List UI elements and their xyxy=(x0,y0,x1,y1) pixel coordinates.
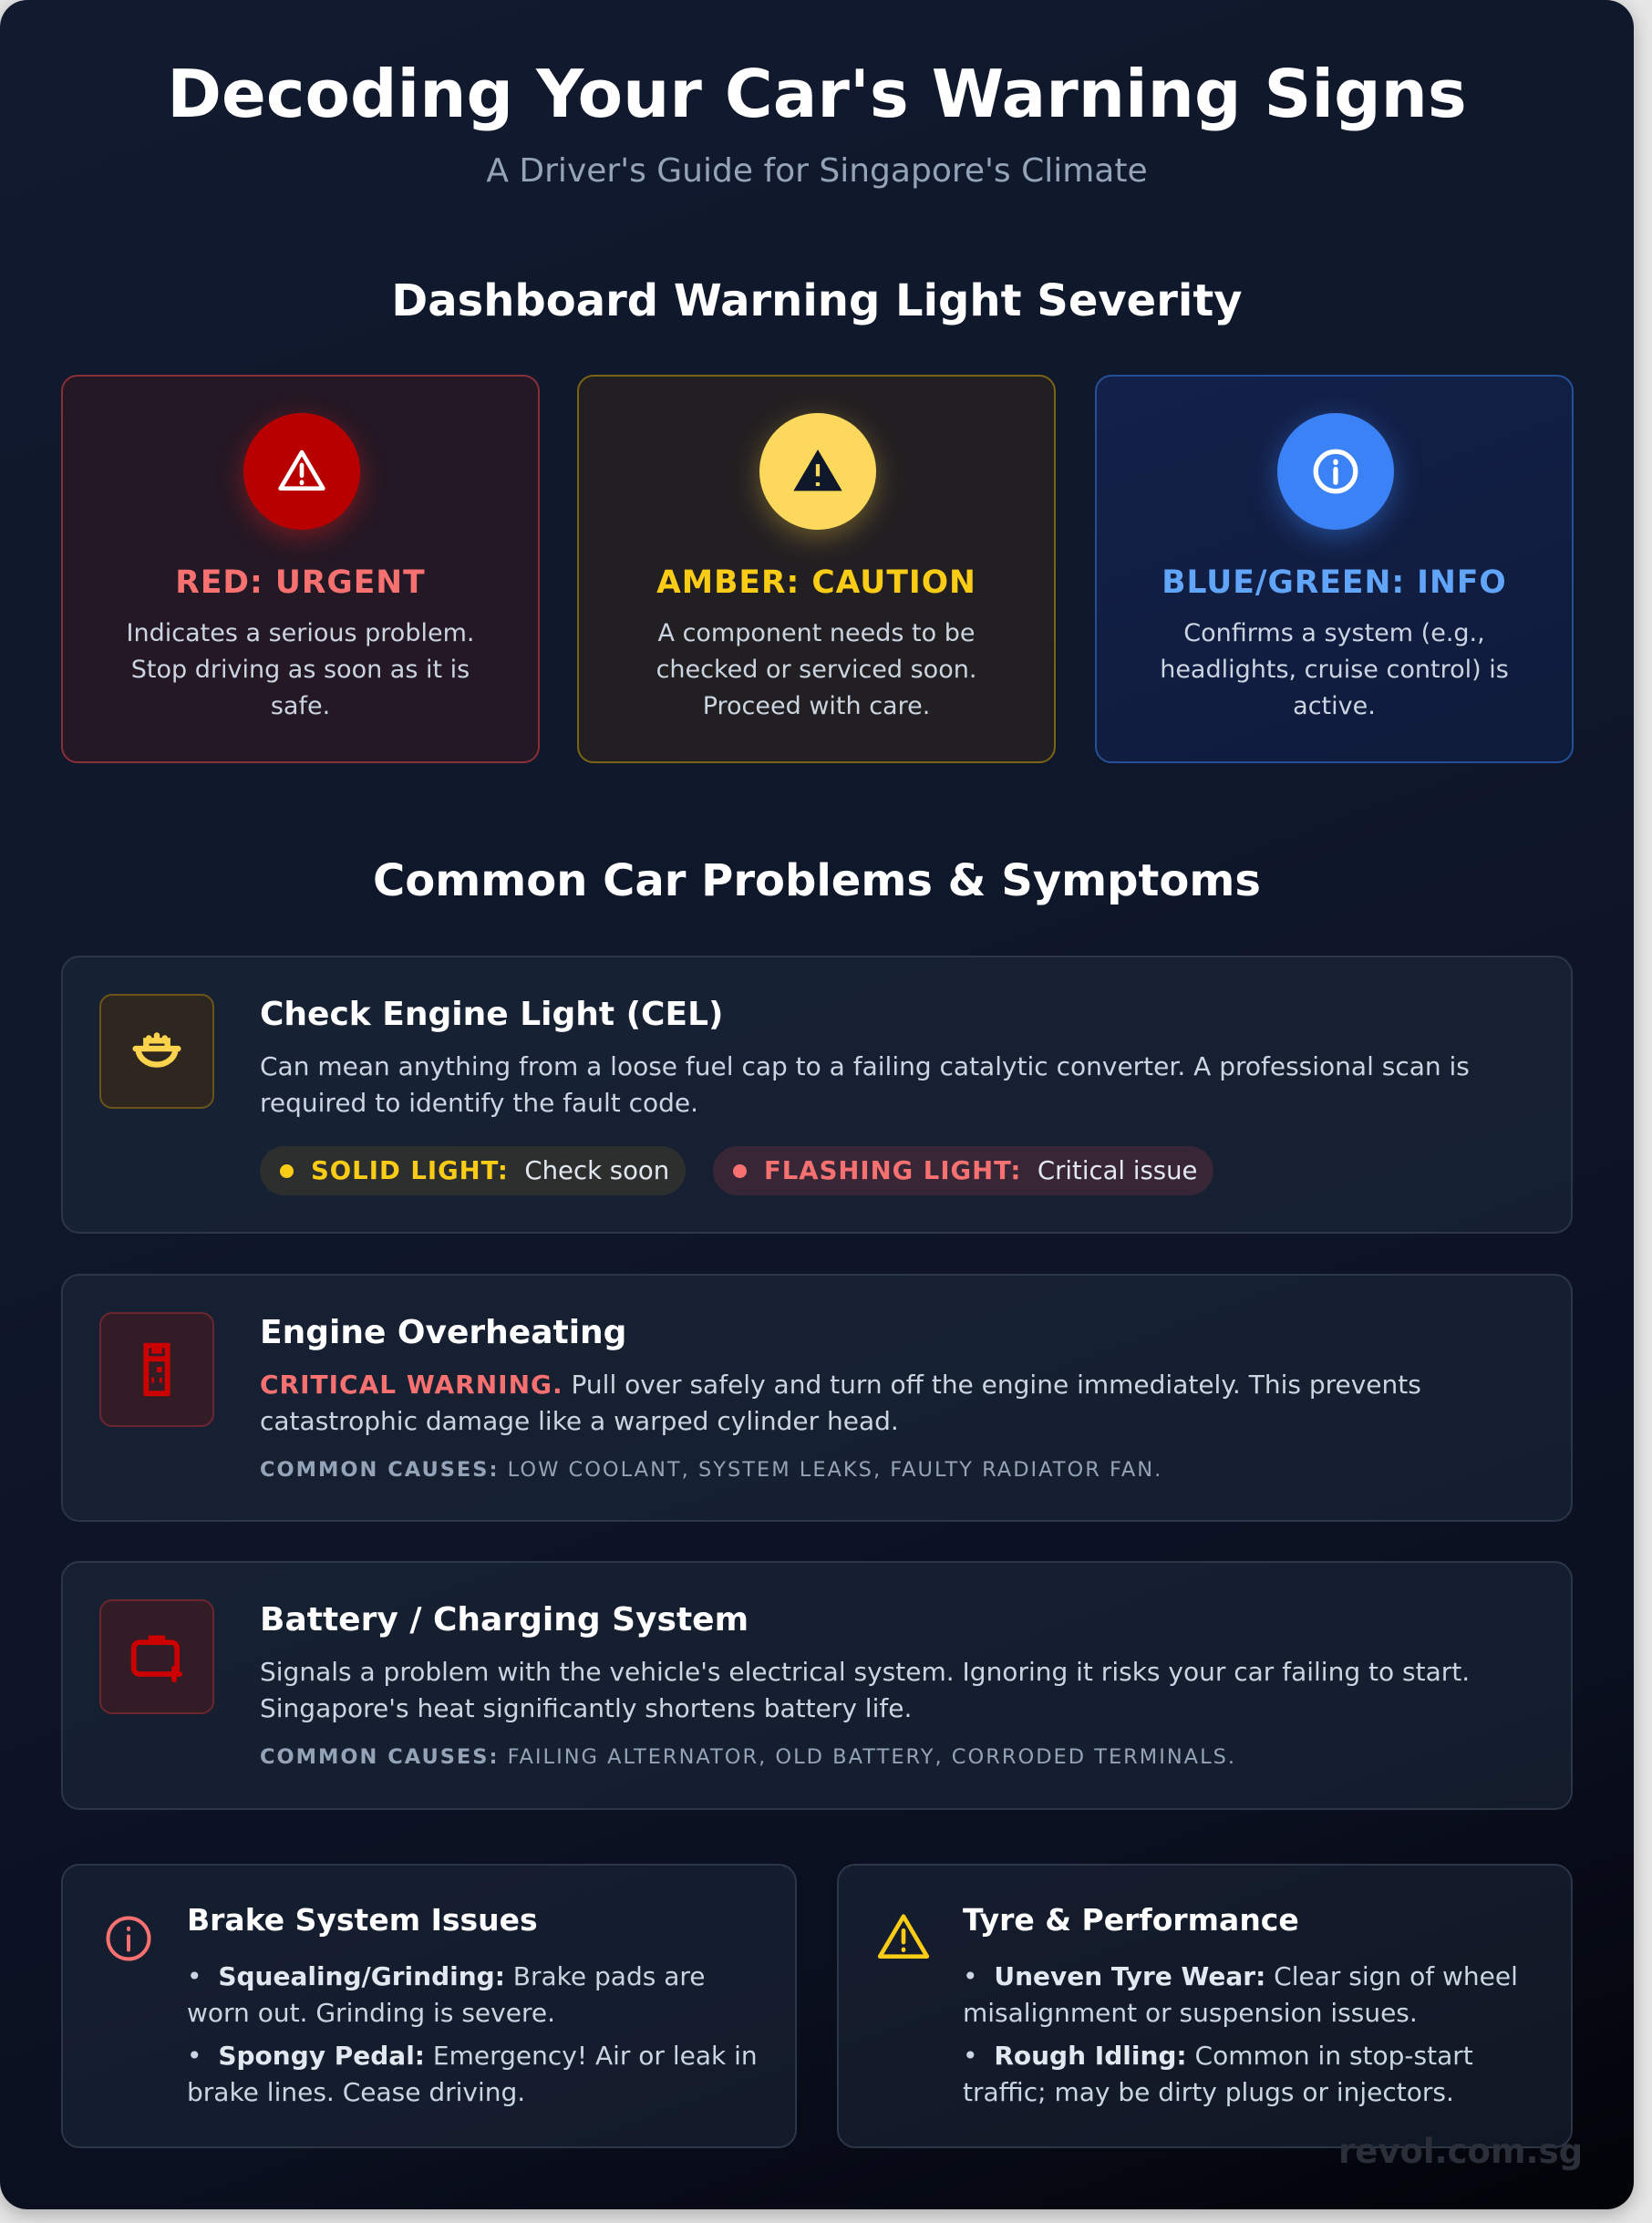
panel: brakes xyxy=(61,1864,797,2148)
bullets: • Squealing/Grinding: Brake pads are worn out. Grinding is severe. xyxy=(187,1961,706,2028)
description: Signals a problem with the vehicle's electrical system. Ignoring it risks your car failing to start. Singapore's heat significantly shortens battery life. xyxy=(260,1657,1470,1723)
description: Indicates a serious problem. Stop driving as soon as it is safe. xyxy=(127,619,474,720)
panel: battery xyxy=(61,1561,1573,1810)
title: Engine Overheating xyxy=(260,1314,626,1351)
panel: check engine light xyxy=(61,956,1573,1234)
label: BLUE/GREEN: INFO xyxy=(1162,564,1507,601)
icon: tyre warning xyxy=(877,1914,930,1959)
icon: red warning xyxy=(243,413,360,530)
heading: severity: Dashboard Warning Light Severity xyxy=(391,275,1243,326)
icon: engine xyxy=(99,994,214,1109)
icon: info xyxy=(1277,413,1394,530)
panel: red urgent xyxy=(61,375,540,763)
watermark: revol.com.sg xyxy=(1338,2132,1583,2171)
bullets: • Uneven Tyre Wear: Clear sign of wheel misalignment or suspension issues. xyxy=(963,1961,1518,2028)
pill: flashing light xyxy=(713,1146,1213,1195)
bullets xyxy=(187,1961,758,2107)
title: Check Engine Light (CEL) xyxy=(260,996,723,1033)
pill: solid light: SOLID LIGHT: Check soon xyxy=(311,1156,669,1185)
description: Confirms a system (e.g., headlights, cruise control) is active. xyxy=(1160,619,1509,720)
panel: blue info xyxy=(1095,375,1574,763)
causes: COMMON CAUSES: FAILING ALTERNATOR, OLD BATTERY, CORRODED TERMINALS. xyxy=(260,1745,1236,1769)
bullets: • Rough Idling: Common in stop-start traffic; may be dirty plugs or injectors. xyxy=(963,2041,1473,2107)
panel: amber caution xyxy=(577,375,1056,763)
icon: brake info xyxy=(106,1917,151,1960)
bullets: • Spongy Pedal: Emergency! Air or leak in brake lines. Cease driving. xyxy=(187,2041,758,2107)
description: CRITICAL WARNING. Pull over safely and turn off the engine immediately. This prevents catastrophic damage like a warped cylinder head. xyxy=(260,1370,1421,1436)
label: AMBER: CAUTION xyxy=(656,564,976,601)
subtitle: A Driver's Guide for Singapore's Climate xyxy=(486,152,1148,190)
panel: overheating xyxy=(61,1274,1573,1522)
description: Can mean anything from a loose fuel cap to a failing catalytic converter. A professional scan is required to identify the fault code. xyxy=(260,1051,1470,1118)
panel: tyres xyxy=(837,1864,1573,2148)
icon: battery xyxy=(99,1599,214,1714)
pill: flashing light: FLASHING LIGHT: Critical issue xyxy=(764,1156,1197,1185)
icon: thermometer xyxy=(99,1312,214,1427)
title: Battery / Charging System xyxy=(260,1601,749,1639)
title: Brake System Issues xyxy=(187,1902,538,1938)
causes: COMMON CAUSES: LOW COOLANT, SYSTEM LEAKS, FAULTY RADIATOR FAN. xyxy=(260,1458,1162,1482)
description: A component needs to be checked or serviced soon. Proceed with care. xyxy=(656,619,976,720)
title: Decoding Your Car's Warning Signs xyxy=(167,56,1467,132)
pill: solid light xyxy=(260,1146,686,1195)
bullets xyxy=(963,1961,1518,2107)
heading: problems: Common Car Problems & Symptoms xyxy=(373,855,1261,906)
label: RED: URGENT xyxy=(175,564,426,601)
title: Tyre & Performance xyxy=(963,1902,1299,1938)
icon: amber warning xyxy=(759,413,876,530)
